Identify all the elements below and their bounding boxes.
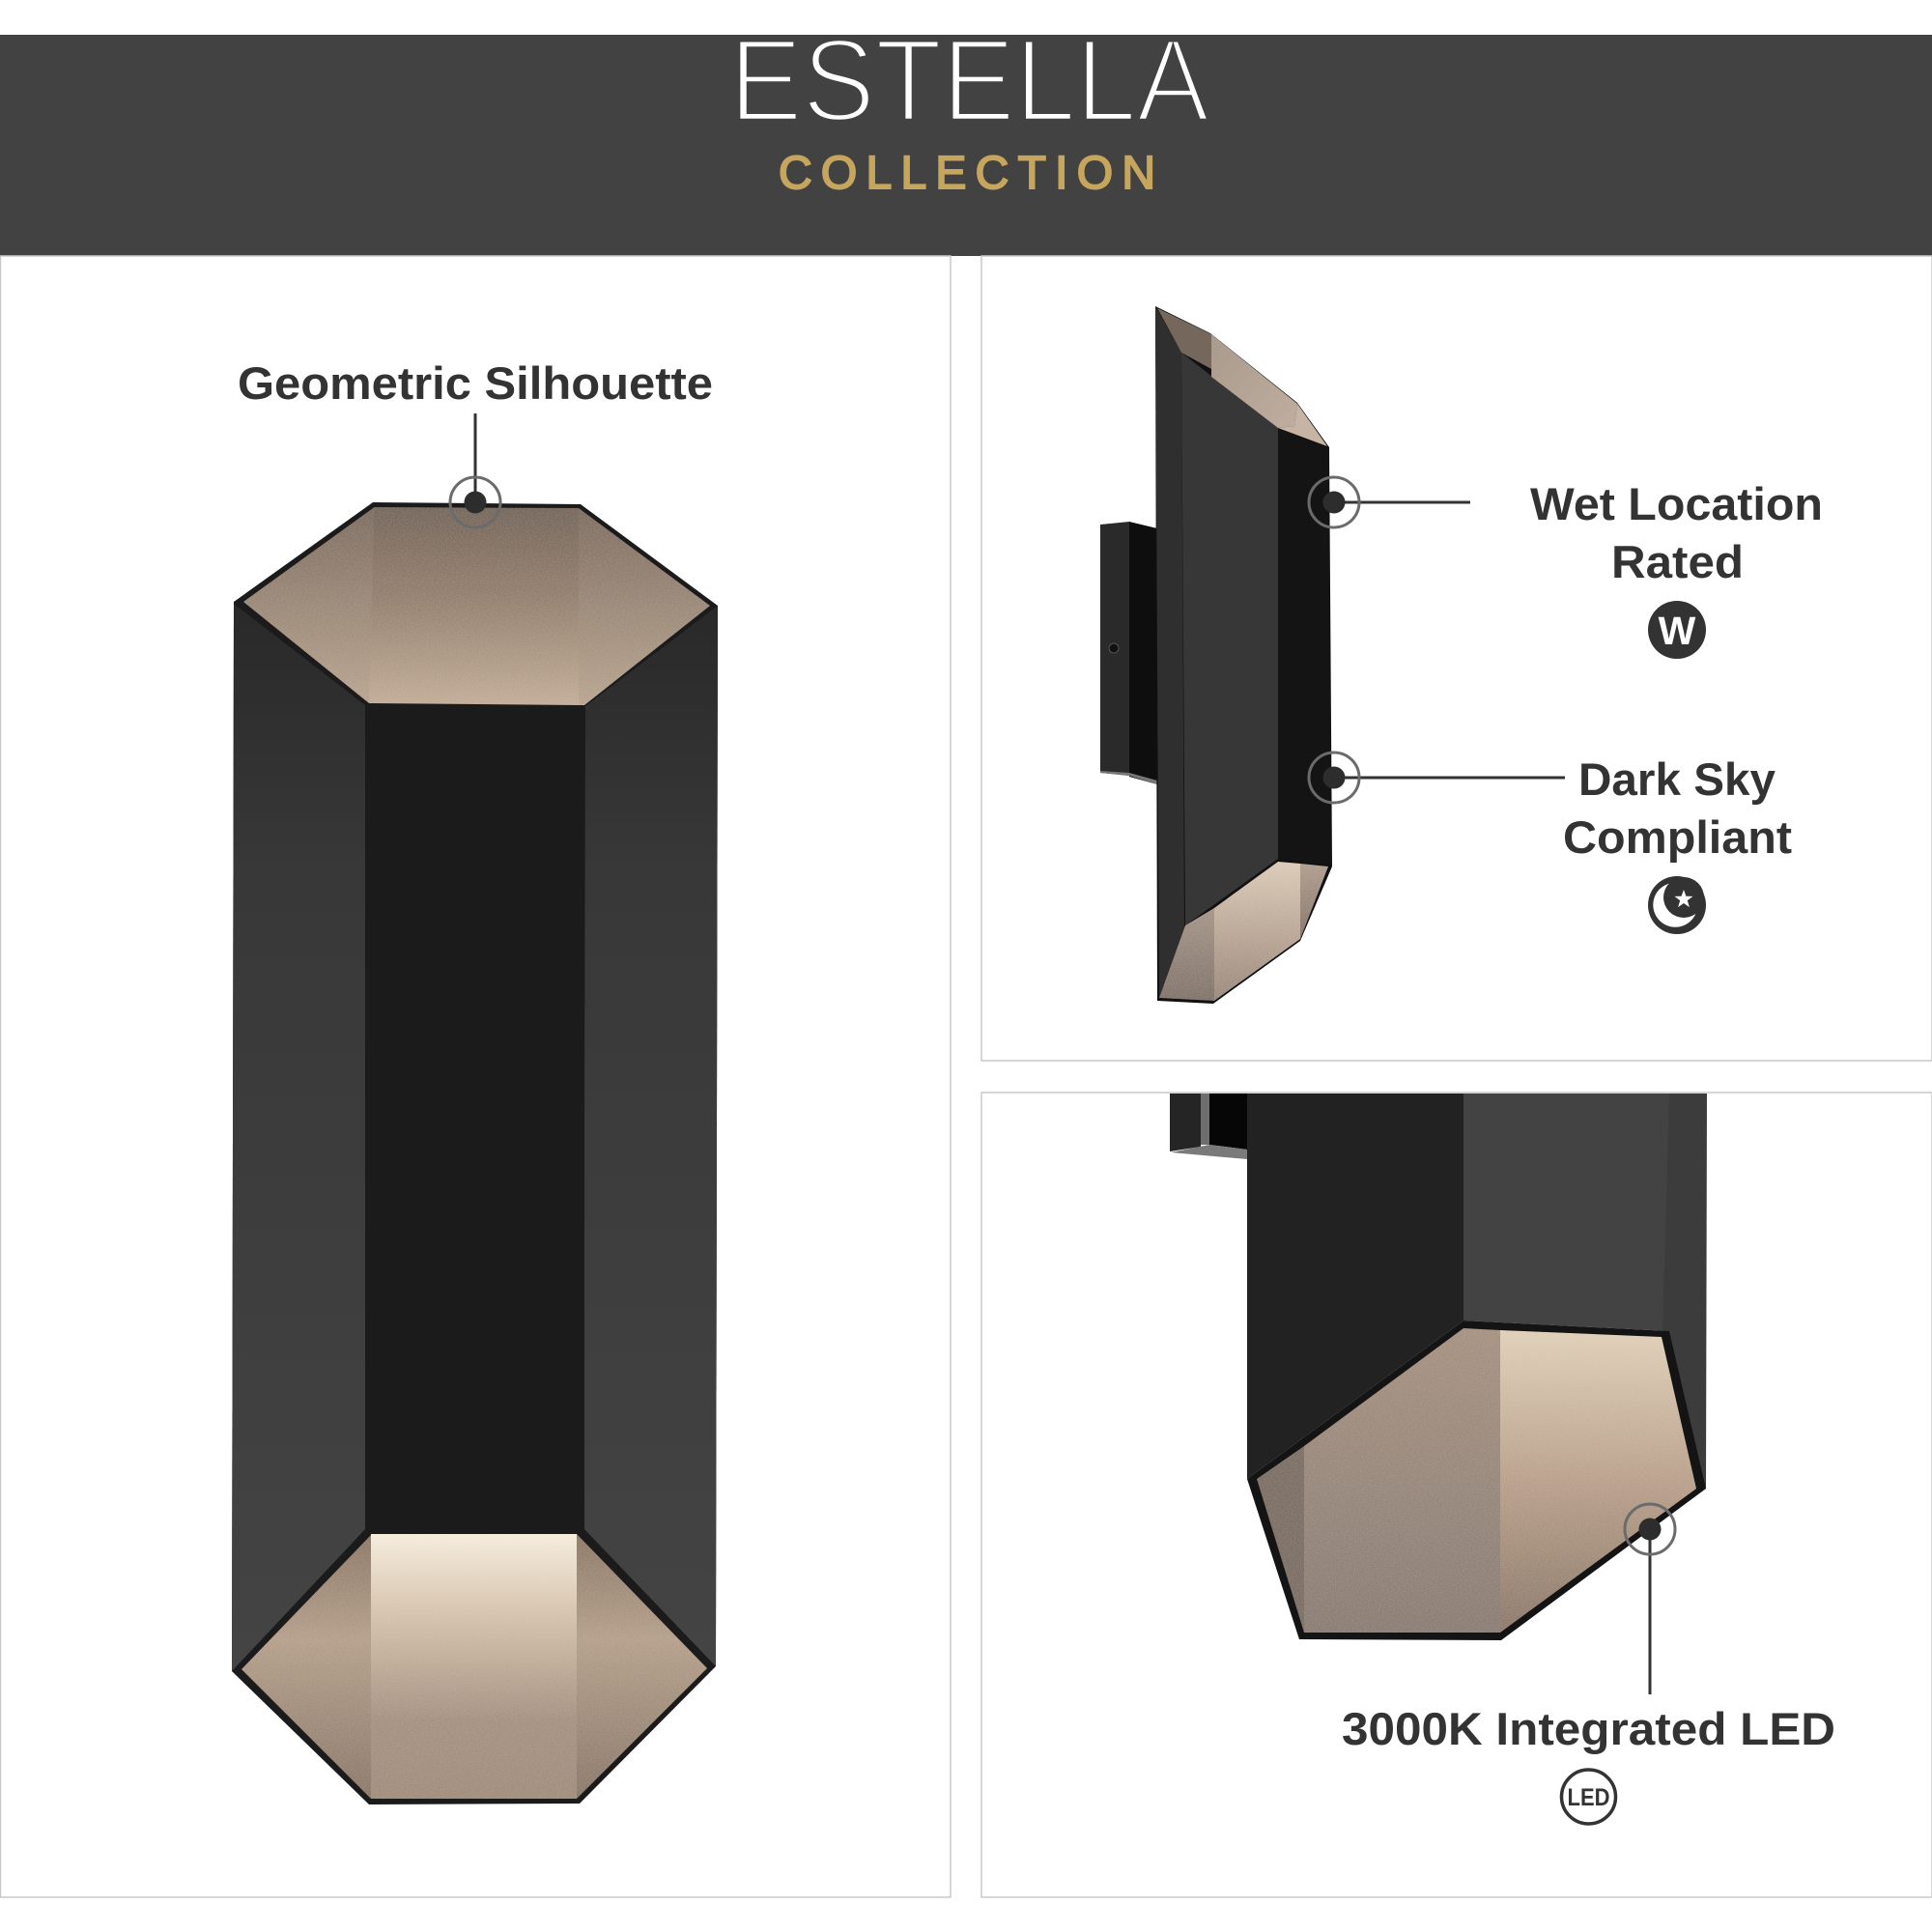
label: Dark Sky Compliant: Compliant bbox=[1563, 811, 1792, 863]
detail view lamp bbox=[1170, 1094, 1707, 1640]
label: Dark Sky Compliant: Dark Sky bbox=[1578, 753, 1776, 805]
icon: LED badge: LED bbox=[1567, 1784, 1609, 1811]
upper interior sliver bbox=[1157, 308, 1327, 446]
callout marker: wet location bbox=[1309, 477, 1470, 527]
label: Wet Location Rated: Wet Location bbox=[1530, 478, 1823, 529]
icon: LED badge bbox=[1561, 1770, 1615, 1824]
label: 3000K Integrated LED: 3000K Integrated LED bbox=[1342, 1703, 1835, 1754]
label: Geometric Silhouette: Geometric Silhouette bbox=[238, 357, 713, 409]
header band bbox=[0, 14, 1932, 256]
callout marker: integrated LED bbox=[1625, 1504, 1675, 1694]
lower interior sliver bbox=[1159, 862, 1328, 1001]
label: Wet Location Rated bbox=[1530, 478, 1823, 587]
label: Wet Location Rated: Rated bbox=[1611, 536, 1744, 587]
label: Dark Sky Compliant bbox=[1563, 753, 1792, 863]
subtitle: COLLECTION: COLLECTION bbox=[779, 148, 1155, 199]
icon: wet location W bbox=[1648, 601, 1706, 659]
mounting bracket bbox=[1100, 522, 1157, 784]
panel: side view bbox=[981, 256, 1932, 1061]
icon: wet location W: W bbox=[1659, 609, 1696, 653]
side view lamp bbox=[1100, 306, 1332, 1004]
front view lamp bbox=[232, 502, 718, 1804]
title: ESTELLA: ESTELLA bbox=[729, 14, 1210, 146]
detail bracket bbox=[1170, 1094, 1247, 1159]
callout marker: silhouette bbox=[450, 413, 500, 527]
callout marker: dark sky bbox=[1309, 753, 1565, 803]
panel: front view bbox=[0, 256, 951, 1897]
upper lamp opening bbox=[243, 507, 710, 705]
lower lamp opening bbox=[242, 1534, 707, 1799]
detail interior bbox=[1257, 1328, 1696, 1633]
panel: detail view bbox=[981, 1093, 1932, 1897]
icon: dark sky moon and star bbox=[1648, 876, 1706, 934]
